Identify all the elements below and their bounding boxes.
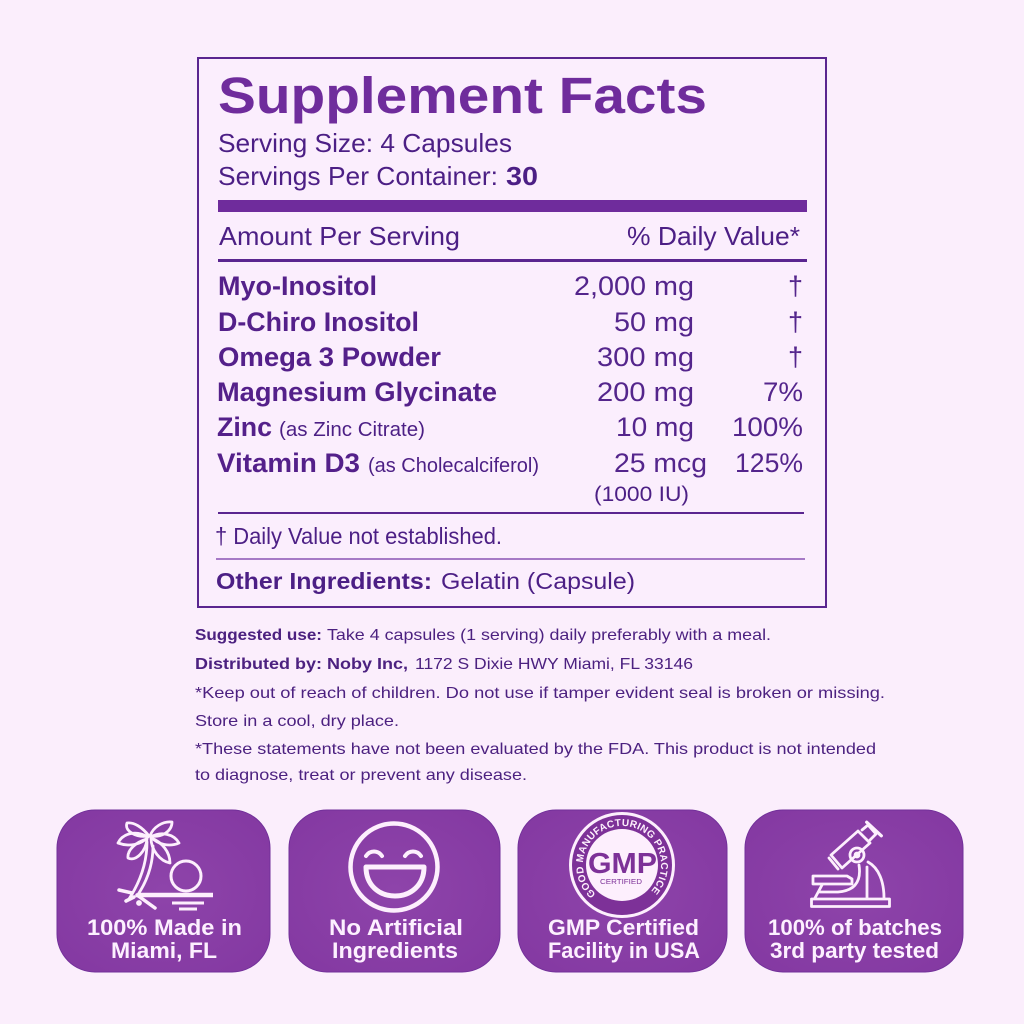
row: Zinc: Zinc [217, 412, 272, 442]
usage and disclaimer text: 1172 S Dixie HWY Miami, FL 33146 [415, 656, 693, 673]
usage and disclaimer text: *These statements have not been evaluated by the FDA. This product is not intended [195, 741, 876, 758]
other ingredients [216, 568, 635, 594]
table header [219, 221, 800, 251]
label: 3rd party tested [770, 938, 939, 963]
row: Vitamin D3: 25 mcg [614, 448, 707, 478]
icon: microscope [812, 822, 890, 906]
serving information: 30 [506, 161, 538, 191]
serving information: Servings Per Container: [218, 161, 498, 191]
title: Supplement Facts [218, 67, 707, 124]
label: Miami, FL [111, 938, 217, 963]
table header: Amount Per Serving [219, 221, 460, 251]
row: Vitamin D3: (as Cholecalciferol) [368, 455, 539, 477]
usage and disclaimer text [195, 627, 885, 784]
row: Zinc: 100% [732, 412, 803, 442]
row: Omega 3 Powder: † [788, 342, 803, 372]
usage and disclaimer text: Distributed by: Noby Inc, [195, 656, 408, 673]
row: Myo-Inositol: Myo-Inositol [218, 271, 377, 301]
row: Omega 3 Powder: Omega 3 Powder [218, 342, 441, 372]
usage and disclaimer text: to diagnose, treat or prevent any disease. [195, 767, 527, 784]
icon: GMP seal [569, 812, 675, 918]
label [87, 915, 242, 963]
row: Omega 3 Powder [218, 342, 803, 372]
other ingredients: Other Ingredients: [216, 568, 432, 594]
row: Vitamin D3: 125% [735, 448, 803, 478]
icon: GMP seal: GMP [588, 848, 657, 880]
icon: palm tree and sun [118, 822, 213, 909]
daily value footnote: † Daily Value not established. [215, 523, 502, 549]
label: No Artificial [329, 915, 463, 940]
icon: GMP seal: GOOD MANUFACTURING PRACTICE [576, 819, 668, 898]
serving information: Serving Size: 4 Capsules [218, 128, 512, 158]
usage and disclaimer text: Take 4 capsules (1 serving) daily preferably with a meal. [327, 627, 771, 644]
icon: laughing face [350, 824, 438, 910]
badge: no artificial ingredients [289, 810, 500, 972]
row: Myo-Inositol [218, 271, 803, 301]
row: Magnesium Glycinate: Magnesium Glycinate [217, 377, 497, 407]
label [548, 915, 700, 963]
label: Facility in USA [548, 938, 700, 963]
badge: GMP certified [518, 810, 728, 972]
row: D-Chiro Inositol [218, 307, 803, 337]
row: D-Chiro Inositol: D-Chiro Inositol [218, 307, 419, 337]
ingredient rows [217, 271, 803, 506]
label: 100% Made in [87, 915, 242, 940]
row: Magnesium Glycinate [217, 377, 803, 407]
label [768, 915, 942, 963]
row: Zinc: 10 mg [616, 412, 694, 442]
row: Myo-Inositol: 2,000 mg [574, 271, 694, 301]
row: Myo-Inositol: † [788, 271, 803, 301]
row: Vitamin D3 [217, 448, 803, 506]
usage and disclaimer text: Store in a cool, dry place. [195, 713, 399, 730]
row: Omega 3 Powder: 300 mg [597, 342, 694, 372]
table header: % Daily Value* [627, 221, 800, 251]
row: Vitamin D3: Vitamin D3 [217, 448, 360, 478]
serving information [218, 128, 538, 191]
row: Zinc [217, 412, 803, 442]
row: Magnesium Glycinate: 7% [763, 377, 803, 407]
label: Ingredients [332, 938, 458, 963]
row: D-Chiro Inositol: 50 mg [614, 307, 694, 337]
label: 100% of batches [768, 915, 942, 940]
badge: made in Miami [57, 810, 270, 972]
usage and disclaimer text: *Keep out of reach of children. Do not use if tamper evident seal is broken or missing. [195, 685, 885, 702]
label [329, 915, 463, 963]
row: D-Chiro Inositol: † [788, 307, 803, 337]
row: Vitamin D3: (1000 IU) [594, 483, 689, 506]
row: Magnesium Glycinate: 200 mg [597, 377, 694, 407]
row: Zinc: (as Zinc Citrate) [279, 419, 425, 441]
panel: supplement facts label [198, 58, 826, 607]
usage and disclaimer text: Suggested use: [195, 627, 322, 644]
other ingredients: Gelatin (Capsule) [441, 568, 635, 594]
icon: GMP seal: CERTIFIED [600, 879, 642, 886]
badge: third party tested [745, 810, 963, 972]
label: GMP Certified [548, 915, 699, 940]
